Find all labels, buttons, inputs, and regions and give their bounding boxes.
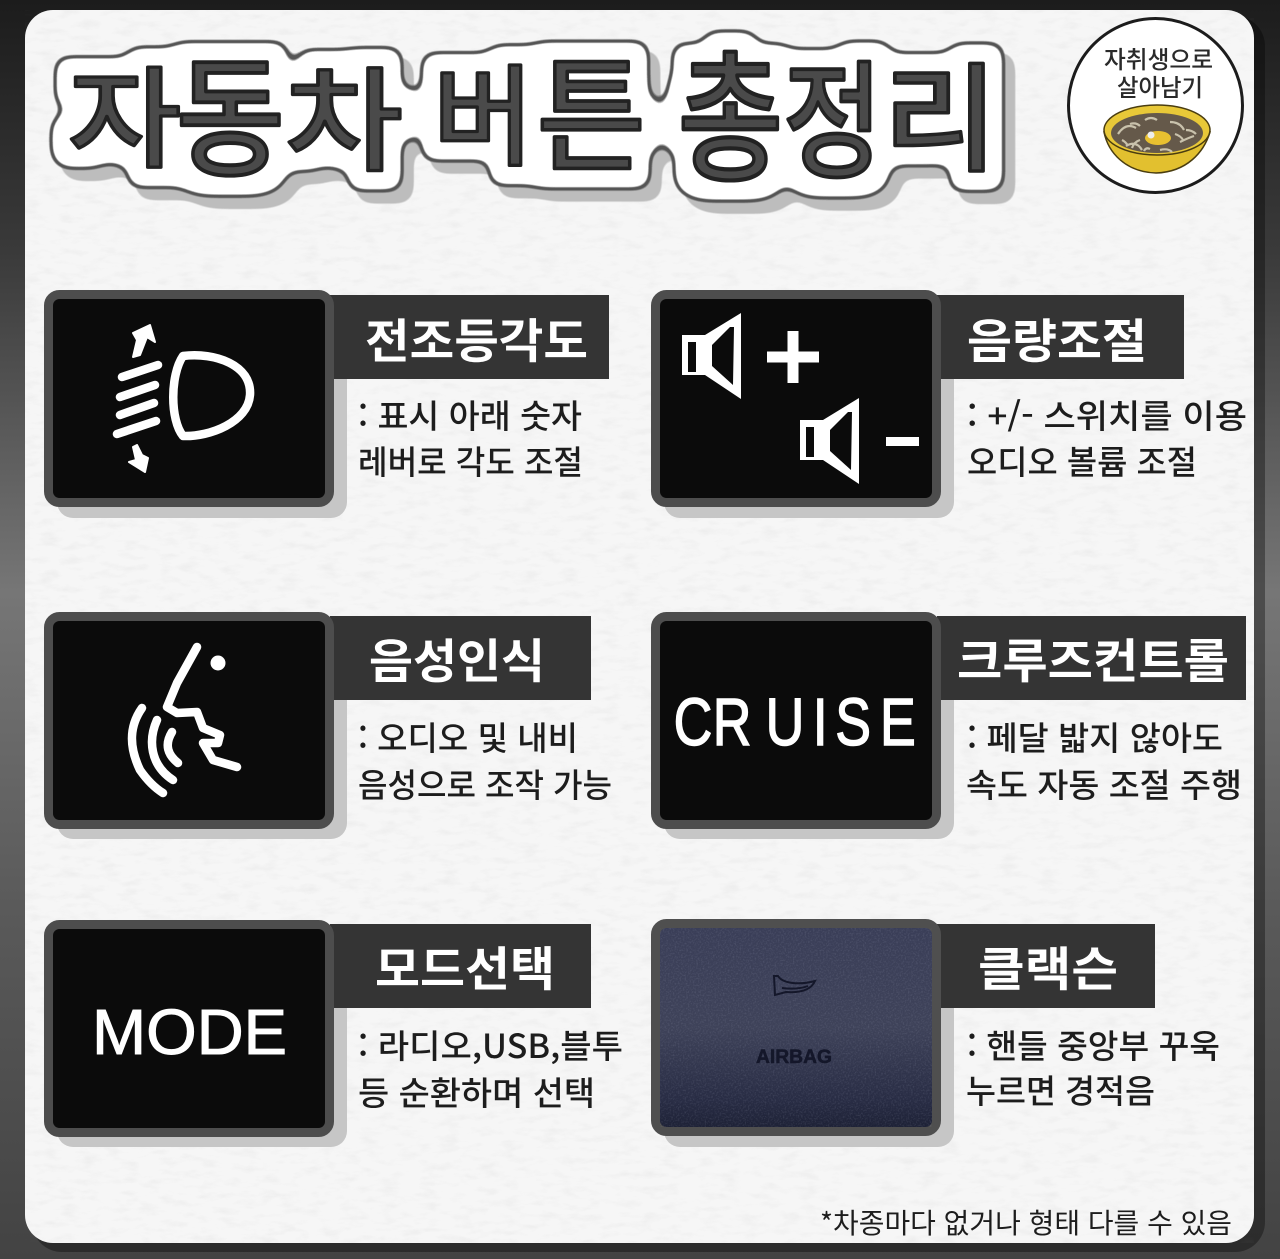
card shadow: [664, 622, 954, 839]
description: 누르면 경적음: [966, 1065, 1155, 1113]
button frame: airbag cover: [656, 924, 936, 1132]
title bar: [937, 924, 1155, 1008]
panel: 음량조절: [656, 294, 1247, 518]
leather grain: [660, 928, 932, 1127]
badge text: [1104, 40, 1213, 103]
card shadow: [57, 930, 347, 1147]
icon: horn: [774, 976, 815, 995]
description: : +/- 스위치를 이용: [967, 390, 1247, 438]
heading: 클랙슨: [978, 931, 1118, 1000]
heading: 모드선택: [375, 931, 555, 1000]
description: : 표시 아래 숫자: [358, 390, 582, 438]
title bar: [937, 295, 1184, 379]
panel: 크루즈컨트롤: [656, 616, 1246, 839]
description: [358, 1020, 623, 1115]
description: 오디오 볼륨 조절: [967, 436, 1197, 484]
card shadow: [664, 930, 954, 1147]
description: 음성으로 조작 가능: [358, 759, 612, 807]
title: 자: [68, 32, 181, 190]
icon: headlamp levelling: [117, 325, 250, 472]
badge text: 자취생으로: [1104, 40, 1213, 75]
description: [966, 1020, 1220, 1113]
heading: 음성인식: [369, 623, 545, 692]
button frame: [48, 924, 330, 1132]
card shadow: [57, 301, 347, 518]
heading: 전조등각도: [365, 303, 588, 372]
icon: MODE label: MODE: [92, 996, 287, 1068]
icon: noodle bowl: [1104, 105, 1210, 173]
description: : 핸들 중앙부 꾸욱: [967, 1020, 1220, 1068]
button frame: [48, 616, 330, 824]
button frame: [48, 294, 330, 502]
title bar: [330, 616, 591, 700]
badge: 자취생으로 살아남기: [1068, 18, 1242, 192]
icon: volume up and down: [682, 313, 919, 484]
heading: 크루즈컨트롤: [957, 623, 1229, 692]
description: : 라디오,USB,블투: [358, 1020, 623, 1068]
title: [68, 5, 998, 210]
title: 차: [285, 31, 403, 194]
description: 레버로 각도 조절: [358, 436, 583, 484]
description: 속도 자동 조절 주행: [966, 759, 1242, 807]
title: 총: [678, 5, 783, 210]
title: 동: [176, 14, 285, 203]
panel: 음성인식: [48, 616, 612, 839]
title: 정: [783, 19, 882, 204]
description: [967, 390, 1247, 484]
badge text: 살아남기: [1117, 68, 1203, 103]
card shadow: [664, 301, 954, 518]
description: : 페달 밟지 않아도: [967, 712, 1223, 760]
card shadow: [57, 622, 347, 839]
icon: CRUISE label: CRUISE: [674, 684, 916, 759]
button frame: [656, 294, 936, 502]
panel: 클랙슨: [656, 924, 1220, 1147]
panel: 전조등각도: [48, 294, 609, 518]
description: [966, 712, 1242, 807]
title: 튼: [537, 17, 646, 196]
panel: 모드선택: [48, 924, 623, 1147]
description: 등 순환하며 선택: [358, 1067, 595, 1115]
footnote: *차종마다 없거나 형태 다를 수 있음: [820, 1202, 1232, 1242]
description: [358, 390, 583, 484]
title bar: [330, 924, 591, 1008]
button frame: [656, 616, 936, 824]
icon: voice recognition: [132, 647, 237, 793]
title bar: [330, 295, 609, 379]
description: [358, 712, 612, 807]
AIRBAG label: AIRBAG: [756, 1047, 832, 1068]
heading: 음량조절: [967, 303, 1147, 372]
title: 버: [433, 31, 533, 188]
title: 리: [883, 26, 998, 195]
description: : 오디오 및 내비: [358, 712, 578, 760]
title bar: [937, 616, 1246, 700]
